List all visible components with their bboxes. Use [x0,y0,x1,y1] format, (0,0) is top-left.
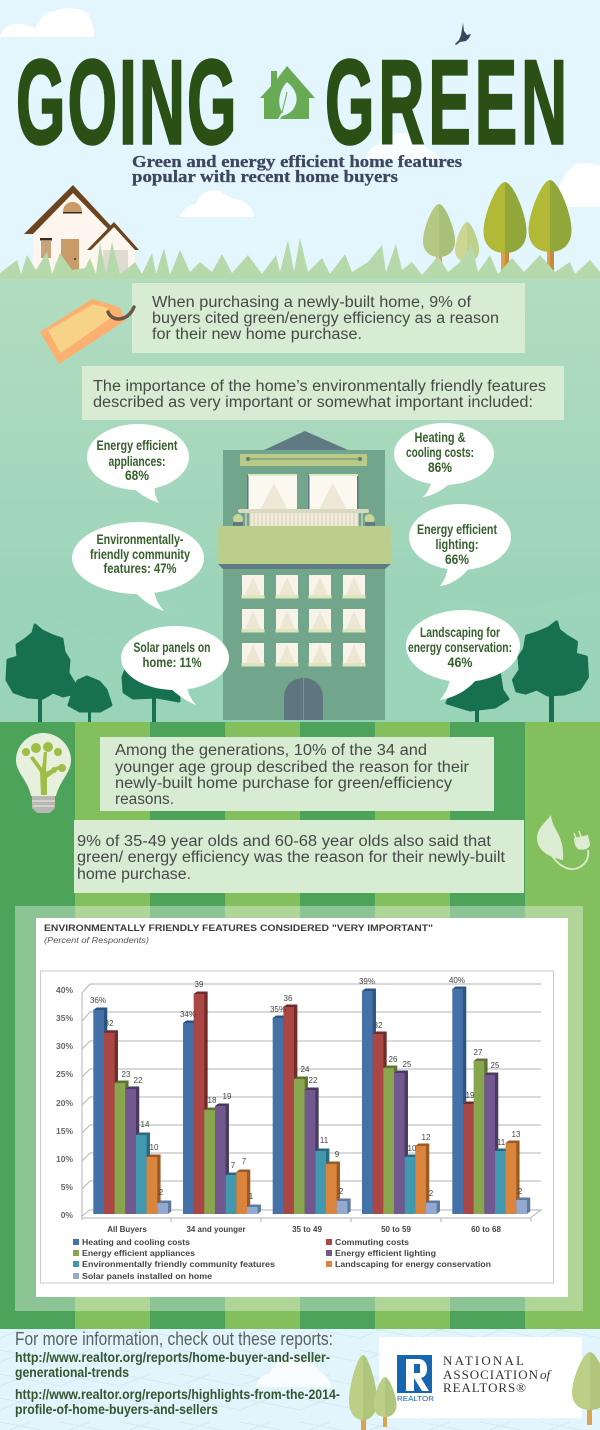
panel: NAR logo: REALTORS® [443,1380,526,1395]
footer links: profile-of-home-buyers-and-sellers [15,1401,218,1417]
legend: Energy efficient appliances [82,1249,196,1258]
callout: energy efficient appliances: Energy efficient [96,438,178,453]
callout: energy efficient appliances [87,424,189,503]
value labels: 32 [105,1019,114,1028]
panel: generations text: Among the generations, 10% of the 34 and [115,742,427,759]
panel: NAR logo [379,1337,582,1418]
legend: Energy efficient lighting [335,1249,436,1258]
value labels: 12 [422,1133,431,1142]
panel: new home purchase reason [132,283,525,353]
callout: heating and cooling costs: Heating & [414,430,466,445]
value labels: 22 [309,1076,318,1085]
sky background [0,0,600,280]
callout: community features: Environmentally- [96,532,184,547]
category labels: 34 and younger [186,1225,246,1234]
callout: energy efficient appliances: 68% [125,468,149,483]
footer links: http://www.realtor.org/reports/home-buyer-and-seller- [15,1349,330,1365]
value labels: 13 [512,1130,521,1139]
callout: community features: features: 47% [104,561,176,576]
balcony railing [233,509,375,526]
series: landscaping [147,1140,520,1214]
callout: energy efficient lighting [409,504,511,586]
clouds [0,8,600,217]
value labels: 7 [231,1161,236,1170]
icon: price tag [40,299,134,364]
icon: bird [455,23,471,45]
panel: footer background [0,1329,600,1430]
value labels: 19 [223,1092,232,1101]
chart heading: (Percent of Respondents) [44,936,149,945]
callout: heating and cooling costs [394,423,494,497]
axis labels: 25% [56,1069,73,1079]
series: energy efficient lighting [125,1070,498,1214]
value labels [90,976,523,1201]
panel: new home purchase reason: for their new home purchase. [152,326,362,343]
value labels: 36% [90,996,106,1005]
background trees [7,622,587,722]
value labels: 1 [249,1192,254,1201]
axis labels [56,985,73,1220]
footer links: generational-trends [15,1364,129,1380]
series: heating and cooling costs [93,986,466,1214]
value labels: 18 [208,1096,217,1105]
category labels [107,1225,501,1234]
value labels: 10 [150,1143,159,1152]
category labels: All Buyers [107,1225,147,1234]
callout: community features [72,522,204,611]
value labels: 23 [122,1070,131,1079]
building [218,431,391,720]
value labels: 10 [408,1144,417,1153]
panel: 35-49 and 60-68 text [74,820,524,893]
panel: striped green background [0,722,600,1329]
footer links: http://www.realtor.org/reports/highlights-from-the-2014- [15,1386,340,1402]
trees: upper right [423,180,572,274]
panel: new home purchase reason: buyers cited green/energy efficiency as a reason [152,310,499,327]
panel: 35-49 and 60-68 text: home purchase. [77,866,191,883]
value labels: 2 [518,1187,523,1196]
value labels: 34% [180,1010,196,1019]
callout: landscaping [406,610,520,700]
series: commuting costs [104,992,477,1214]
subtitle [132,152,462,186]
panel: chart card [36,918,568,1297]
icon: house [24,185,139,280]
panel: mint background [0,279,600,723]
value labels: 7 [242,1157,247,1166]
axis labels: 0% [61,1210,73,1220]
series: solar panels [157,1198,530,1214]
callout: energy efficient lighting: lighting: [436,537,478,552]
panel: importance of features: described as very important or somewhat important included: [93,394,533,411]
value labels: 27 [474,1048,483,1057]
grass [0,238,600,280]
legend [73,1238,491,1281]
axis labels: 20% [56,1098,73,1108]
value labels: 39% [359,977,375,986]
value labels: 32 [374,1021,383,1030]
legend: Commuting costs [335,1238,410,1247]
panel: NAR logo: of [540,1367,552,1382]
series: community features [136,1132,509,1214]
icon: house with leaf [260,66,315,119]
panel: generations text [100,737,494,811]
chart heading: ENVIRONMENTALLY FRIENDLY FEATURES CONSIDERED "VERY IMPORTANT" [44,923,433,933]
callout: energy efficient lighting: Energy efficient [417,522,497,537]
panel: 35-49 and 60-68 text: green/ energy efficiency was the reason for their newly-built [77,849,506,866]
title: GOING [16,36,239,170]
callout: community features: friendly community [90,547,190,562]
value labels: 2 [429,1189,434,1198]
category labels: 60 to 68 [471,1225,501,1234]
panel: NAR logo: NATIONAL [443,1353,524,1368]
value labels: 25 [403,1060,412,1069]
panel: NAR logo: ASSOCIATION [443,1367,539,1382]
callout: landscaping: 46% [448,655,472,670]
footer links [15,1349,340,1417]
value labels: 19 [466,1091,475,1100]
door [284,678,323,720]
panel: NAR logo: REALTOR [397,1396,434,1403]
panel: generations text: reasons. [115,791,174,808]
big windows [247,474,358,513]
category labels: 50 to 59 [381,1225,411,1234]
axis labels: 15% [56,1126,73,1136]
axis labels: 5% [61,1182,73,1192]
value labels: 39 [195,980,204,989]
value labels: 35% [270,1005,286,1014]
panel: importance of features [82,366,564,420]
value labels: 2 [339,1187,344,1196]
legend: Landscaping for energy conservation [335,1260,491,1269]
value labels: 26 [389,1055,398,1064]
value labels: 22 [134,1076,143,1085]
legend: Environmentally friendly community features [82,1260,276,1269]
value labels: 2 [159,1188,164,1197]
callout: solar panels: Solar panels on [134,640,210,655]
value labels: 14 [141,1120,150,1129]
category labels: 35 to 49 [292,1225,322,1234]
callout: solar panels: home: 11% [142,655,202,670]
value labels: 25 [491,1061,500,1070]
panel: translucent chart frame [15,906,583,1311]
trees: footer [349,1352,600,1430]
bar chart [40,971,554,1283]
value labels: 24 [301,1065,310,1074]
icon: leaf and plug [537,815,590,869]
footer heading: For more information, check out these reports: [15,1329,333,1349]
icon: light bulb with tree [16,733,71,813]
series: energy efficient appliances [115,1058,488,1214]
chart heading [44,923,433,945]
value labels: 11 [497,1138,506,1147]
title: GREEN [325,36,571,170]
subtitle: Green and energy efficient home features [132,152,462,171]
callout: energy efficient lighting: 66% [445,552,469,567]
callout: landscaping: Landscaping for [420,625,501,640]
panel: generations text: newly-built home purchase for green/efficiency [115,775,452,792]
callout: energy efficient appliances: appliances: [108,454,166,469]
axis labels: 40% [56,985,73,995]
panel: importance of features: The importance of the home’s environmentally friendly features [93,378,546,395]
callout: landscaping: energy conservation: [408,640,512,655]
axis labels: 30% [56,1041,73,1051]
value labels: 9 [335,1150,340,1159]
callout: solar panels [121,626,229,705]
small windows [242,575,366,666]
axis labels: 10% [56,1154,73,1164]
value labels: 11 [320,1136,329,1145]
panel: generations text: younger age group described the reason for their [115,759,469,776]
axis labels: 35% [56,1013,73,1023]
subtitle: popular with recent home buyers [132,167,398,186]
legend: Solar panels installed on home [82,1272,213,1281]
callout: heating and cooling costs: 86% [428,460,452,475]
panel: 35-49 and 60-68 text: 9% of 35-49 year olds and 60-68 year olds also said that [77,833,492,850]
panel: new home purchase reason: When purchasing a newly-built home, 9% of [152,294,472,311]
title [16,36,571,170]
legend: Heating and cooling costs [82,1238,191,1247]
value labels: 36 [284,994,293,1003]
callout: heating and cooling costs: cooling costs: [406,445,474,460]
value labels: 40% [449,976,465,985]
